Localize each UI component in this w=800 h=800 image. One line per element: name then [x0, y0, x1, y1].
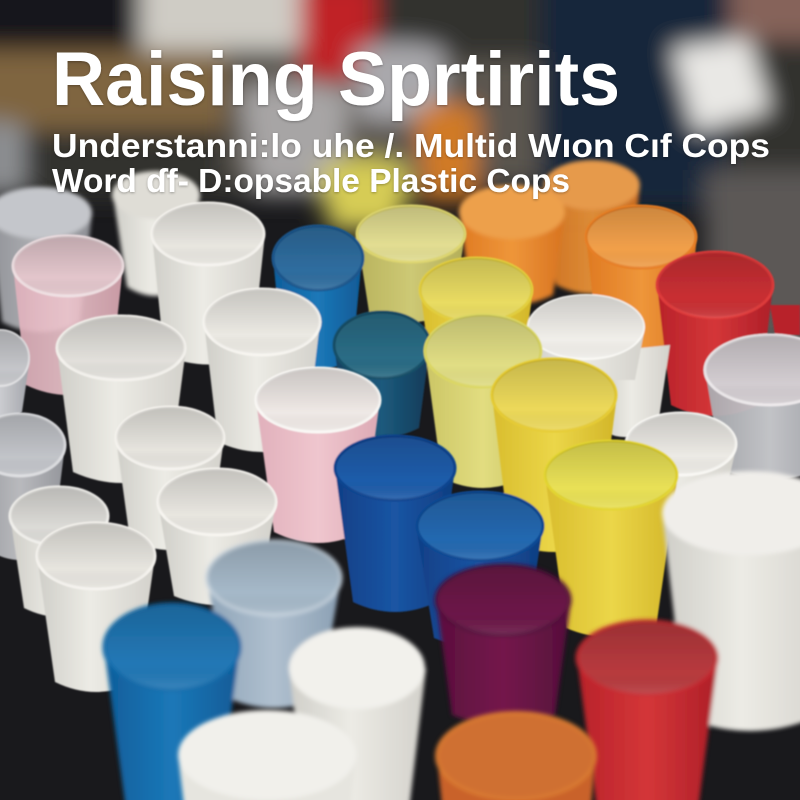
cup: nearest white — [178, 710, 356, 800]
cup: pale yellow tall — [425, 315, 541, 488]
cup: white short right — [626, 413, 737, 520]
cup: large white right — [662, 471, 800, 731]
cup: blue tall — [335, 436, 455, 612]
nearest cups — [178, 710, 596, 800]
cup: white tall back — [152, 203, 265, 364]
cup: pink left — [13, 236, 123, 395]
cup: pale yellow back — [357, 206, 465, 322]
cup: white centre short — [158, 469, 276, 605]
cup: back white — [112, 171, 200, 296]
foreground cups — [104, 471, 800, 800]
cup: purple — [436, 565, 571, 725]
cup: white stack — [528, 295, 645, 380]
cup: pale blue — [207, 541, 341, 708]
cup: clear left back — [0, 187, 92, 332]
cup: clear left edge — [0, 330, 30, 420]
cup: pink centre — [256, 368, 380, 543]
cup: back orange mid — [459, 185, 565, 305]
subtitle line 1: Understanni:lo uhe /. Multid Wıon Cıf Cops — [52, 127, 770, 164]
cup: white front left — [37, 523, 155, 692]
title: Raising Sprtirits — [52, 37, 620, 122]
middle row of cups — [0, 203, 800, 488]
cup: yellow small — [420, 258, 533, 387]
cup: nearest orange — [437, 713, 596, 800]
cup: white far left short — [10, 487, 109, 617]
cup: front red — [577, 621, 718, 800]
cup: white behind right — [600, 345, 670, 437]
front-middle row of cups — [0, 359, 737, 692]
blurred background scene — [0, 0, 800, 350]
subtitle line 2: Word ɗf- D:opsable Plastic Cops — [52, 162, 570, 199]
title block — [52, 37, 770, 199]
cup: yellow tall — [492, 359, 617, 552]
cup: orange right — [586, 206, 697, 356]
cup: clear right — [705, 335, 800, 480]
back row of cups — [0, 160, 640, 332]
cup: white centre left — [204, 289, 320, 452]
cup: blue front — [416, 492, 543, 648]
cup: front white centre — [289, 627, 426, 800]
cup: front blue — [104, 604, 240, 800]
cup: clear left lower — [0, 414, 65, 560]
cup: blue back — [273, 226, 363, 369]
cup: back orange small — [544, 160, 640, 294]
cup: teal — [334, 312, 430, 438]
cup: white ribbed — [57, 316, 186, 483]
cup: yellow large — [545, 441, 678, 638]
cup: white small left — [116, 407, 224, 550]
cup: red with handle — [657, 252, 800, 416]
